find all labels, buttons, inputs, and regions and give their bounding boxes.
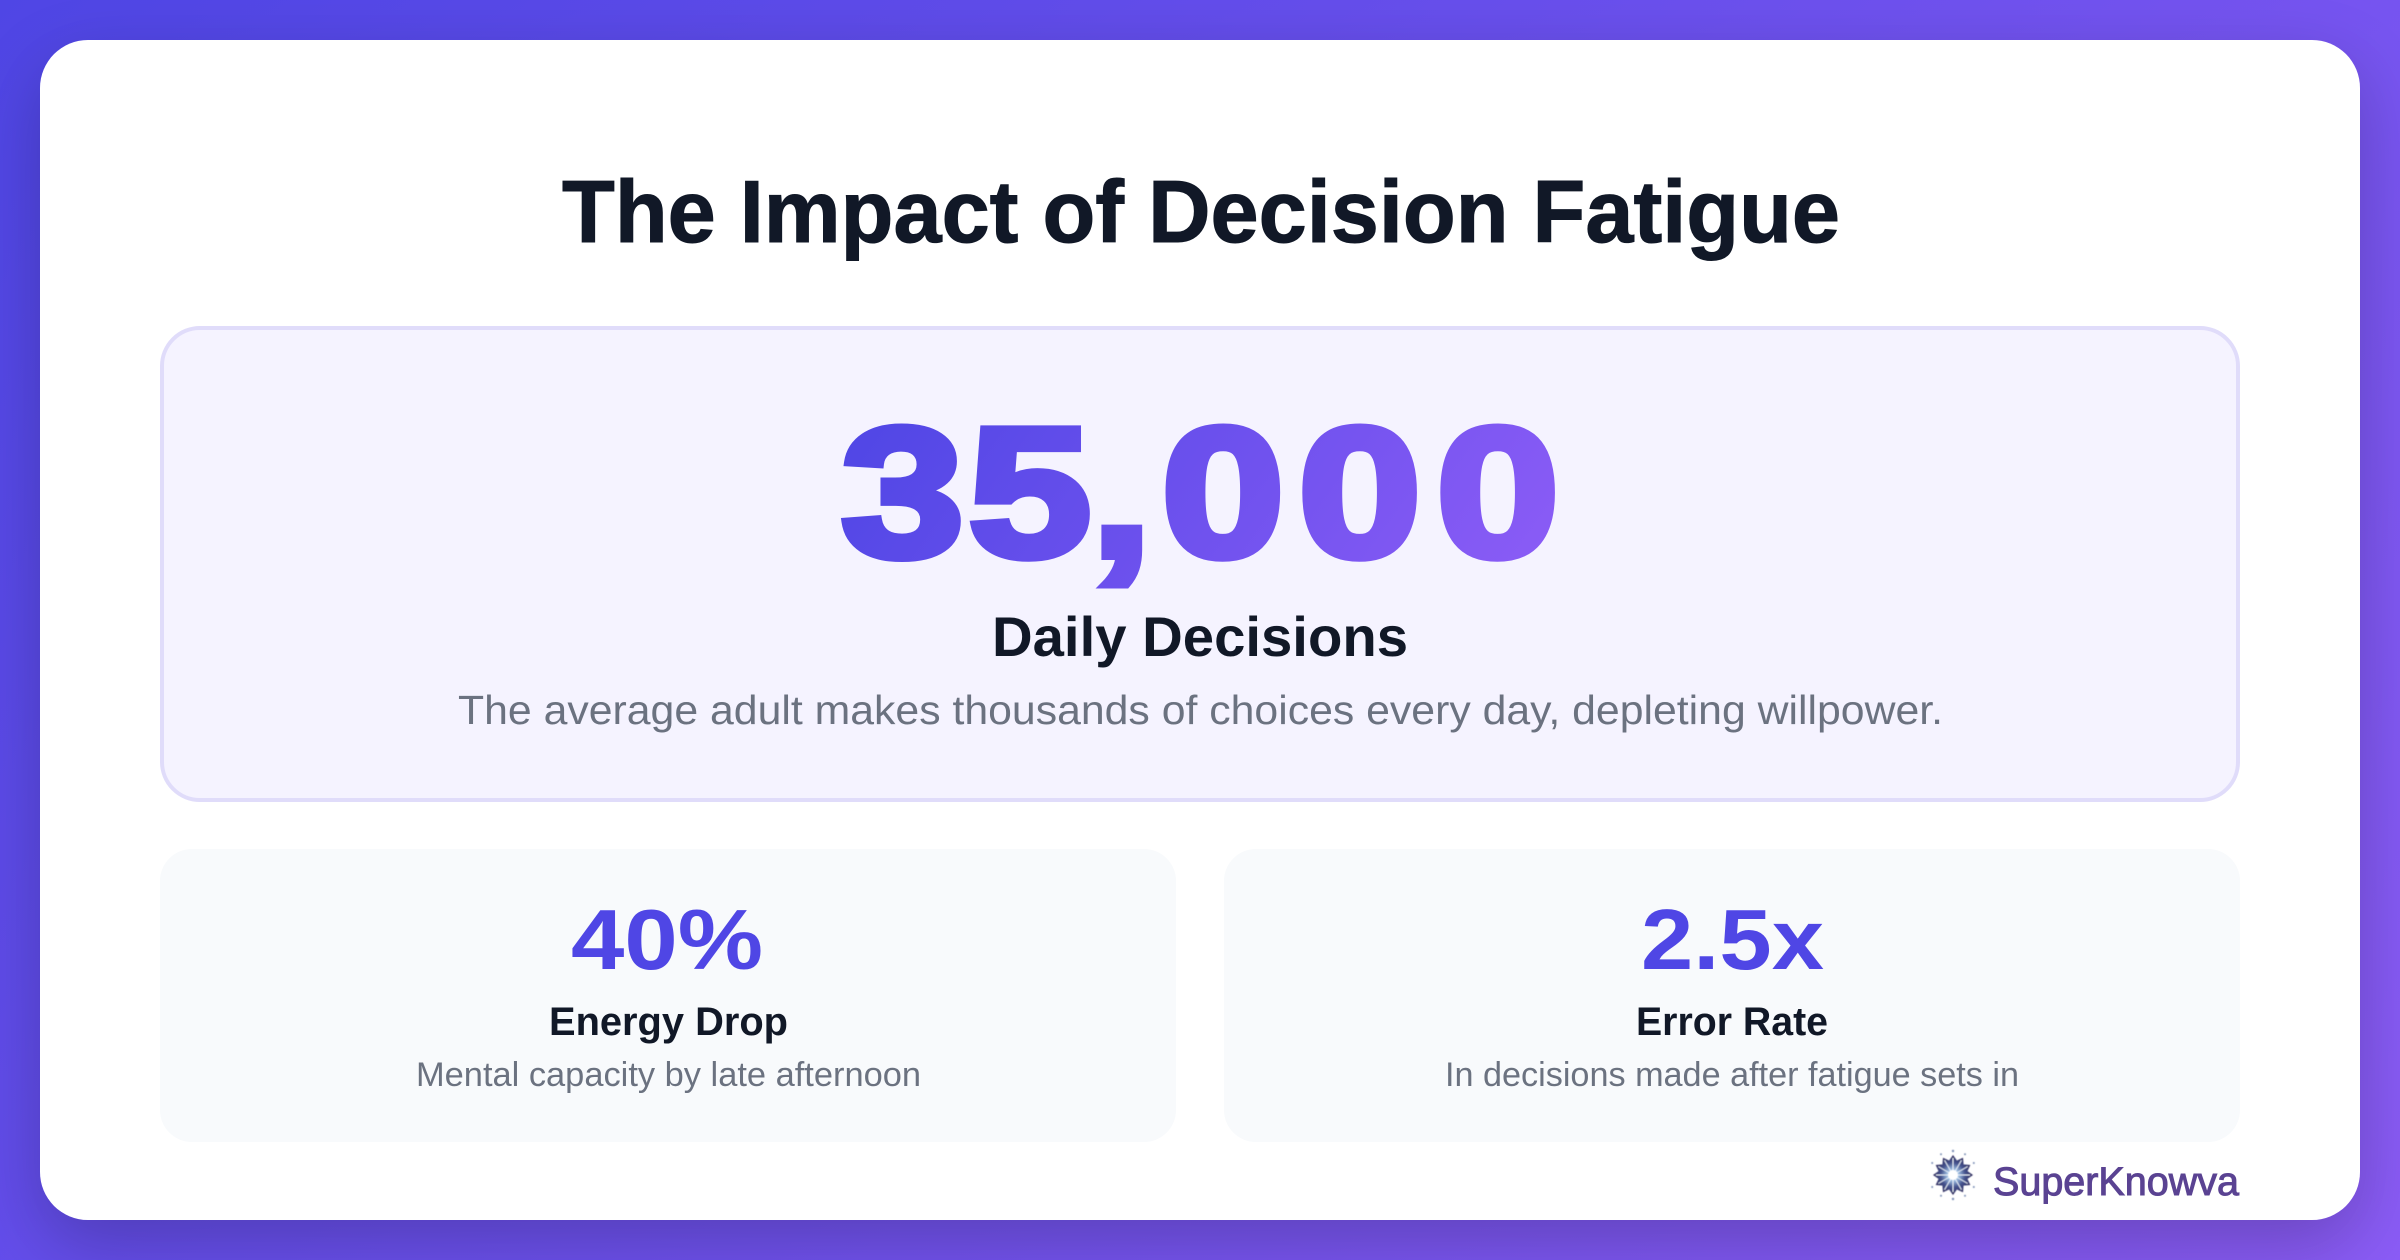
panel: hero stat (162, 328, 2238, 800)
error label: Error Rate (1636, 1000, 1828, 1044)
icon: star emblem (1931, 1150, 1975, 1200)
hero label: Daily Decisions (992, 605, 1408, 668)
energy description: Mental capacity by late afternoon (416, 1056, 921, 1094)
energy label: Energy Drop (549, 1000, 788, 1044)
hero number: 35,000 (841, 390, 1559, 596)
error description: In decisions made after fatigue sets in (1445, 1056, 2019, 1094)
logo wordmark: SuperKnowva (1993, 1160, 2240, 1204)
panel: error rate (1224, 849, 2240, 1142)
hero description: The average adult makes thousands of choices every day, depleting willpower. (458, 687, 1943, 733)
panel: energy drop (160, 849, 1176, 1142)
error value: 2.5x (1641, 893, 1824, 988)
energy value: 40% (571, 893, 763, 988)
title: The Impact of Decision Fatigue (562, 162, 1840, 261)
logo (1931, 1150, 2240, 1204)
